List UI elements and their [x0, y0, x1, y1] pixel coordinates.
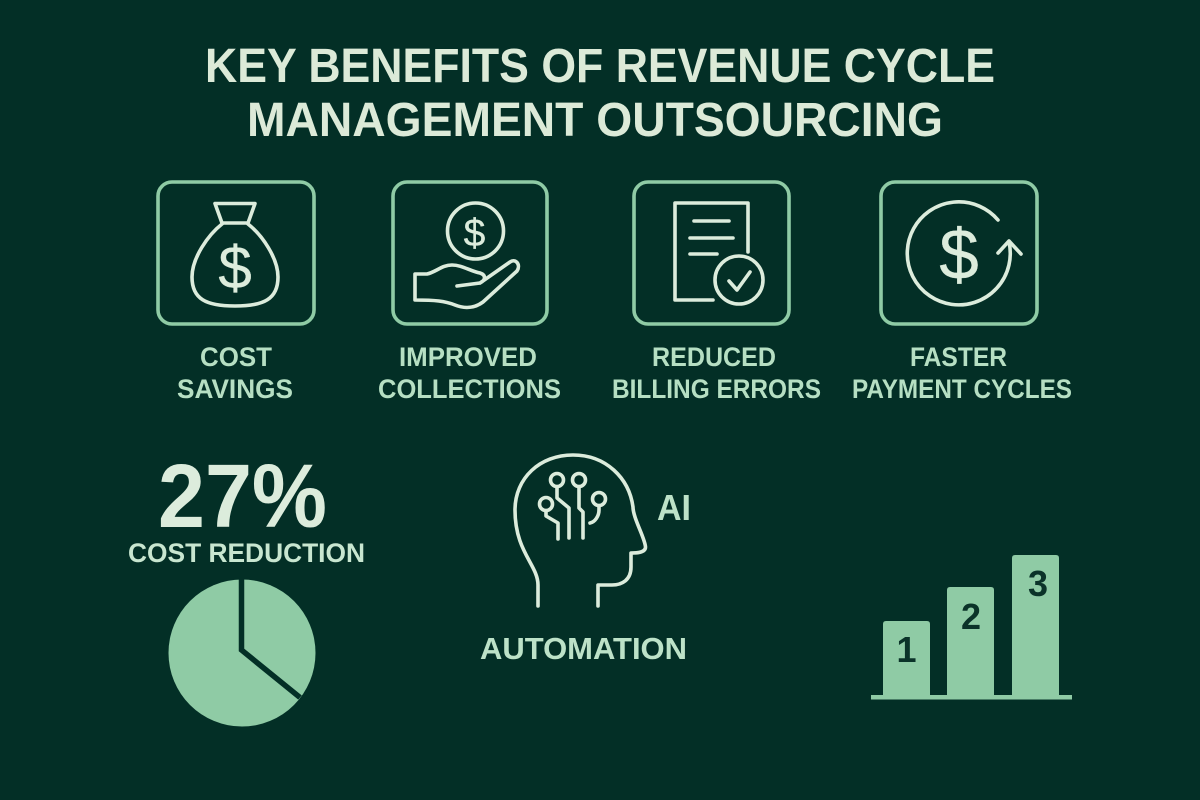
title: KEY BENEFITS OF REVENUE CYCLE — [205, 39, 995, 93]
title — [205, 39, 995, 147]
label: cost savings: SAVINGS — [177, 374, 293, 404]
bar 2: 2 — [961, 596, 981, 637]
label: automation: AUTOMATION — [480, 632, 687, 666]
bar 1 — [883, 621, 930, 698]
icon: coin over hand: $ — [464, 212, 486, 255]
icon: dollar cycle — [907, 202, 1021, 305]
label: reduced billing errors: REDUCED — [652, 342, 776, 372]
label: reduced billing errors — [612, 342, 821, 404]
icon: coin over hand — [415, 203, 518, 307]
stat caption: COST REDUCTION — [128, 538, 365, 568]
panel: reduced billing errors — [612, 182, 821, 404]
bar chart: steps 1 2 3 — [871, 555, 1072, 700]
label: AI: AI — [657, 487, 691, 528]
stat number: 27% — [158, 447, 327, 547]
panel: AI automation — [480, 455, 691, 666]
bar 1: 1 — [896, 629, 917, 670]
pie chart — [168, 578, 316, 726]
bar 2 — [947, 587, 994, 698]
icon: document with check — [675, 203, 763, 304]
icon: money bag: $ — [218, 234, 252, 301]
icon: money bag — [192, 204, 278, 306]
panel: faster payment cycles — [852, 182, 1072, 404]
panel: cost savings — [158, 182, 314, 404]
bar 3: 3 — [1028, 563, 1048, 604]
label: cost savings: COST — [200, 342, 272, 372]
label: improved collections: COLLECTIONS — [378, 374, 561, 404]
icon: dollar cycle: $ — [939, 216, 979, 295]
chart baseline — [871, 695, 1072, 700]
bar 3 — [1012, 555, 1059, 698]
label: cost savings — [177, 342, 293, 404]
title: MANAGEMENT OUTSOURCING — [247, 93, 943, 147]
label: faster payment cycles — [852, 342, 1072, 404]
label: faster payment cycles: PAYMENT CYCLES — [852, 374, 1072, 404]
stat: 27% cost reduction — [128, 447, 365, 568]
label: reduced billing errors: BILLING ERRORS — [612, 374, 821, 404]
icon: AI head — [515, 455, 646, 606]
label: faster payment cycles: FASTER — [910, 342, 1007, 372]
label: improved collections — [378, 342, 561, 404]
panel: improved collections — [378, 182, 561, 404]
label: improved collections: IMPROVED — [399, 342, 537, 372]
